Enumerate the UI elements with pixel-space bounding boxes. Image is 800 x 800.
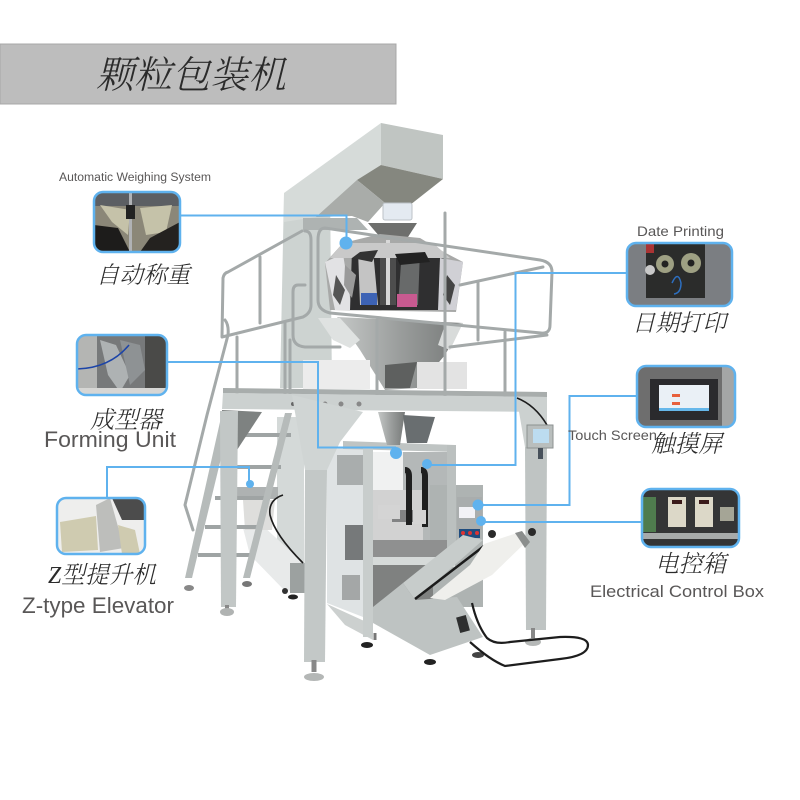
- silver forming cone: [378, 412, 435, 445]
- leader: date printing: [422, 273, 626, 469]
- callout: forming unit: 成型器: [90, 408, 165, 434]
- callout: forming unit: Forming Unit: [44, 427, 176, 452]
- z elevator base: [236, 487, 305, 600]
- output conveyor: [373, 528, 536, 665]
- forming frame: [343, 441, 456, 648]
- leader: touch screen: [472, 396, 636, 510]
- weigher discharge cone: [337, 317, 463, 390]
- callout: automatic weighing: [59, 172, 211, 289]
- callout: automatic weighing: Automatic Weighing System: [59, 172, 211, 184]
- callout: z-type elevator: Z-type Elevator: [22, 593, 174, 618]
- power cables: [270, 398, 588, 666]
- support boxes: [303, 360, 467, 389]
- callout: automatic weighing: 自动称重: [96, 263, 192, 289]
- thumbnail: former: [77, 335, 167, 395]
- front main leg: [292, 395, 363, 681]
- ladder: [184, 413, 292, 591]
- packaging machine illustration: [184, 123, 588, 681]
- callout: date printing: 日期打印: [632, 311, 729, 337]
- platform: [222, 388, 547, 412]
- callout: touch screen: Touch Screen: [568, 427, 657, 443]
- platform railing: [185, 213, 552, 530]
- thumbnail: printer ribbon: [627, 243, 732, 306]
- thumbnail: weighing hoppers: [94, 192, 180, 252]
- thumbnail: electrical cabinet: [642, 489, 739, 547]
- callout: touch screen: 触摸屏: [651, 431, 725, 458]
- leader: forming unit: [168, 362, 402, 459]
- leader lines and dots: [107, 216, 641, 526]
- left rear leg: [220, 410, 262, 616]
- callout: date printing: [627, 223, 732, 337]
- bag former handles: [378, 470, 426, 527]
- callout: forming unit: [44, 335, 176, 452]
- control panel: [457, 497, 482, 538]
- column top dark bracket: [303, 218, 368, 230]
- leader: electrical box: [476, 516, 641, 526]
- title banner: 颗粒包装机: [96, 55, 288, 97]
- thumbnail: grain bucket: [57, 498, 145, 554]
- multihead weigher: [325, 203, 463, 312]
- thumbnail: touch screen: [637, 366, 735, 427]
- callout: electrical control box: Electrical Control Box: [590, 582, 765, 601]
- bagging machine body: [327, 445, 483, 640]
- touch screen box: [527, 425, 553, 459]
- title banner: [0, 44, 396, 104]
- leader: z elevator: [107, 467, 254, 497]
- right rear leg: [517, 397, 547, 646]
- back section behind frame: [277, 417, 304, 563]
- callout: z-type elevator: [22, 498, 174, 618]
- elevator top hopper: [284, 123, 443, 222]
- leader: automatic weighing: [180, 216, 352, 250]
- callout: electrical control box: [590, 489, 765, 601]
- callout: touch screen: [568, 366, 735, 458]
- elevator column: [280, 190, 332, 388]
- lifting column cable loop: [293, 285, 340, 347]
- callout: date printing: Date Printing: [637, 223, 724, 239]
- callout: electrical control box: 电控箱: [655, 551, 730, 578]
- callout: z-type elevator: Z型提升机: [48, 562, 157, 589]
